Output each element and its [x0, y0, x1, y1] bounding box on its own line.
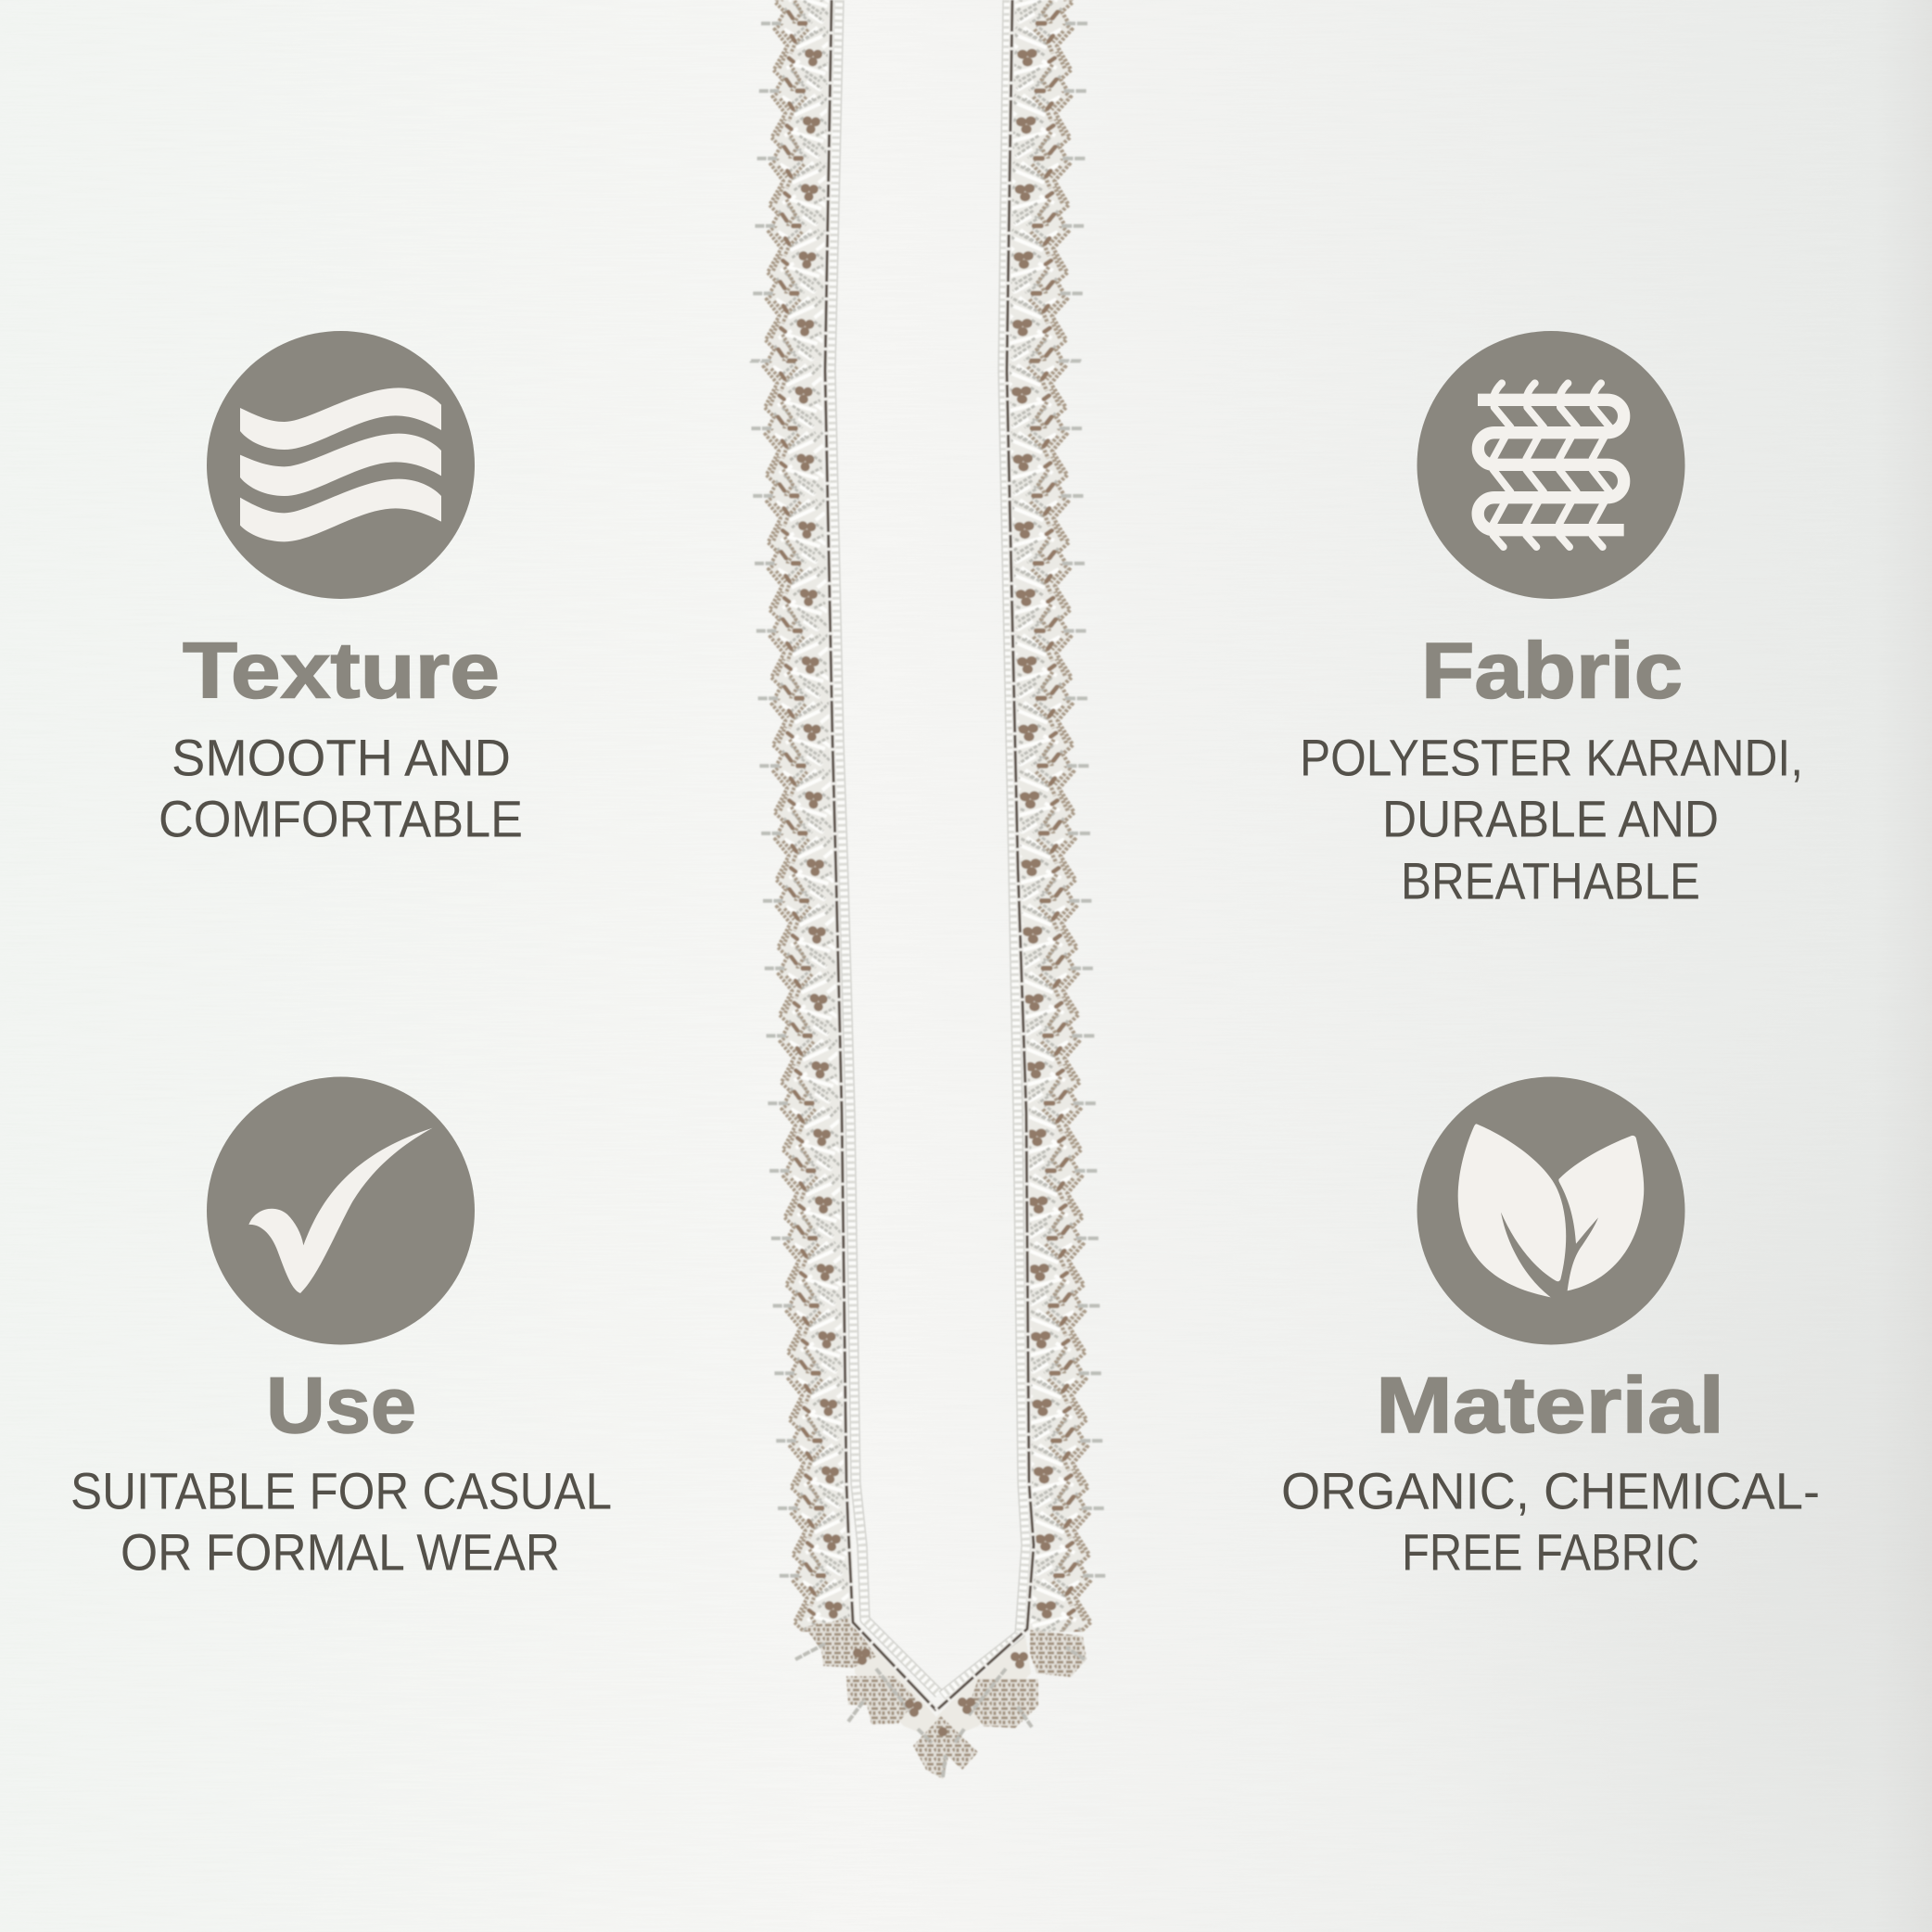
- text: Material description: ORGANIC, CHEMICAL-: [1281, 1461, 1820, 1520]
- text: Texture description: SMOOTH AND: [172, 729, 511, 786]
- text: Texture description: [159, 729, 523, 847]
- heading: Use: Use: [266, 1362, 416, 1450]
- embroidery band: right: [988, 0, 1118, 1632]
- embroidery band: left: [740, 0, 864, 1632]
- heading: Fabric: Fabric: [1421, 627, 1683, 716]
- text: Use description: [70, 1461, 612, 1582]
- text: Fabric description: [1300, 729, 1803, 910]
- panel: Texture: [159, 331, 523, 847]
- panel: Use: [70, 1077, 612, 1582]
- text: Texture description: COMFORTABLE: [159, 790, 523, 847]
- text: Material description: [1281, 1461, 1820, 1582]
- text: Use description: SUITABLE FOR CASUAL: [70, 1461, 612, 1520]
- cord: right: [936, 0, 1034, 1710]
- text: Fabric description: DURABLE AND: [1382, 790, 1719, 847]
- icon: check mark: [207, 1077, 475, 1344]
- text: Material description: FREE FABRIC: [1402, 1522, 1699, 1582]
- heading: Material: Material: [1376, 1362, 1724, 1450]
- icon: leaves: [1417, 1077, 1685, 1344]
- text: Use description: OR FORMAL WEAR: [121, 1522, 560, 1582]
- panel: Fabric: [1300, 331, 1803, 910]
- embroidery: V-point motif: [795, 1618, 1087, 1779]
- panel: Material: [1281, 1077, 1820, 1582]
- heading: Texture: Texture: [183, 627, 500, 716]
- icon: knit weave: [1417, 331, 1685, 599]
- cord: left: [825, 0, 939, 1710]
- text: Fabric description: POLYESTER KARANDI,: [1300, 729, 1803, 786]
- embroidered neckline: [740, 0, 1118, 1779]
- text: Fabric description: BREATHABLE: [1401, 851, 1700, 910]
- icon: waves: [207, 331, 475, 599]
